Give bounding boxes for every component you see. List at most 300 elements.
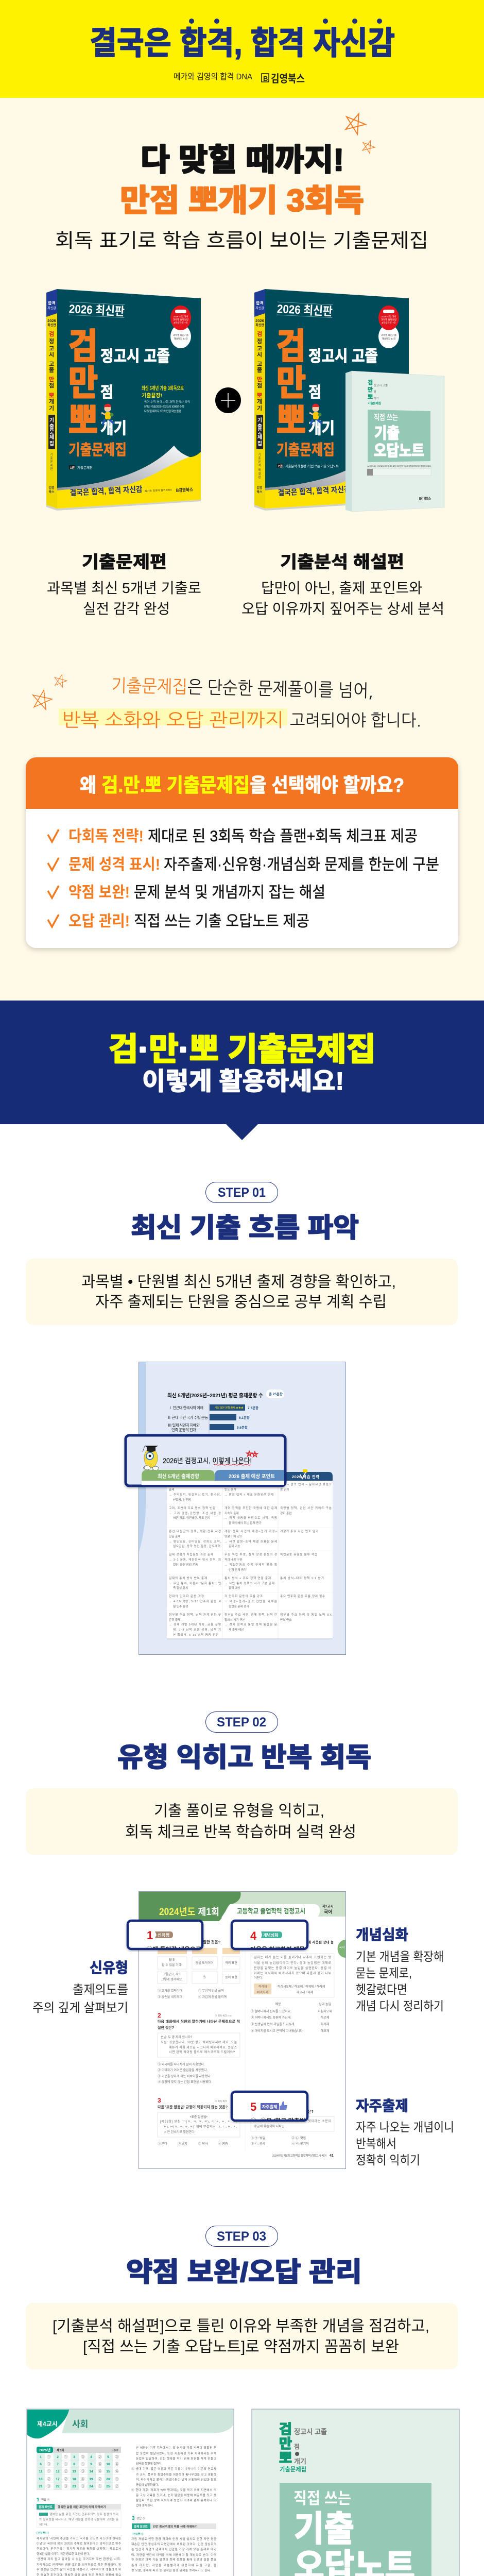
step 2 description: 기출 풀이로 유형을 익히고, <box>154 1803 324 1820</box>
spine text: 합격 <box>256 300 264 306</box>
answer key table: 25 <box>106 2485 110 2488</box>
table column 3: 주요 민주화 운동 흐름 정리 필수 <box>280 1594 325 1598</box>
spine text: 고 <box>49 346 54 352</box>
highlight box: concept depth <box>232 1921 307 1953</box>
page header: 제4교시 <box>37 2420 58 2428</box>
answer key table: 12 <box>56 2470 60 2473</box>
exam question 5: 첫이라는 소문이 <box>308 2119 331 2123</box>
table column 3: 개항기 주요 사건 연표 암기 <box>280 1529 318 1533</box>
step 3 description: [직접 쓰는 기출 오답노트]로 약점까지 꼼꼼히 보완 <box>83 2338 399 2355</box>
step 3 title: 약점 보완/오답 관리 <box>126 2258 362 2287</box>
exam question 4 <box>251 1940 334 2033</box>
cover red and white badges: 과목별 최신기출 <box>381 333 396 337</box>
bar chart: average questions: Ⅱ 근대 국민 국가 수립 운동 <box>167 1415 208 1420</box>
answer key table: p.169 <box>112 2449 118 2452</box>
cover red and white badges: &학습전략 7강 <box>174 321 188 325</box>
commentary left column <box>37 2497 121 2576</box>
table column 2: 개혁 정책을 추진한 국왕에 대한 문제 <box>224 1506 277 1510</box>
commentary right column: 는 인간과 자연의 관계에서 인간을 가장 가치 있는 존재로 여기 <box>131 2547 216 2551</box>
answer key table: 19 <box>89 2478 93 2481</box>
banner heading: 검·만·뽀 기출문제집 <box>109 1032 376 1067</box>
list item 4 <box>48 913 309 930</box>
spine text: 최신판 <box>47 323 56 327</box>
callout: new type: 신유형 <box>90 1960 128 1976</box>
callout: concept depth: 개념 다시 정리하기 <box>356 1999 444 2013</box>
book: commentary volume <box>254 289 409 511</box>
book caption: commentary volume <box>241 552 444 617</box>
exam question 2: ② 이해하기 어려운 줄임말을 사용했다. <box>158 2068 208 2072</box>
answer key table: 9 <box>90 2463 92 2466</box>
cover running kid mascot <box>309 404 322 425</box>
banner tagline: 메가와 김영의 합격 DNA <box>174 72 252 81</box>
exam question 2: 메뉴가 지회 셰프님 시그니처 메뉴라서요. 콘찰스 <box>169 2045 237 2049</box>
note series logo <box>279 2421 327 2473</box>
table column 2: 을 파악해야 하는 문제 증가 <box>229 1521 262 1525</box>
page header: 사회 <box>72 2419 88 2429</box>
cover big title: 개기 <box>308 419 335 437</box>
handwritten line 2 end: 고려되어야 합니다. <box>290 712 421 728</box>
answer key table: ① <box>47 2469 50 2473</box>
table column 1: → 경제 개발 5개년 계획, 금융 실명 <box>169 1622 221 1626</box>
book caption: commentary volume: 답만이 아닌, 출제 포인트와 <box>261 580 422 596</box>
table column 2: 인형 문제 증가 <box>229 1568 247 1572</box>
callout: concept depth: 헷갈렸다면 <box>356 1983 407 1997</box>
spine text: 기 <box>257 404 262 412</box>
commentary right column: 농업이 발달하여, 강한 햇빛을 막기 위해 창문을 작게 만들고 <box>136 2456 216 2461</box>
table column 1: 임오군란, 동학 농민 운동, 갑오개혁 <box>173 1544 220 1548</box>
page header <box>27 2410 233 2438</box>
white body background <box>0 1124 484 2576</box>
answer key table: ④ <box>98 2462 102 2466</box>
note series logo: 개기 <box>294 2458 306 2465</box>
mascot <box>143 1446 159 1470</box>
list item 2: 문제 성격 표시! <box>68 856 160 873</box>
step 2 description: 회독 체크로 반복 학습하며 실력 완성 <box>125 1824 356 1841</box>
exam question 2: 2 <box>158 2012 161 2019</box>
note logo: 뽀 <box>368 394 373 400</box>
commentary right column: | 정답풀이 | <box>132 2532 144 2536</box>
note logo <box>368 379 388 405</box>
highlight box: new type <box>128 1921 202 1953</box>
commentary right column: 인간 중심주의의 적용 사례 이해하기 <box>153 2524 197 2529</box>
spine text: 만 <box>49 376 54 383</box>
exam question 5: 은? <box>308 2110 314 2114</box>
table column 1: 흥선 대원군의 정책, 개항 전후 사건 <box>169 1529 221 1533</box>
answer key table: 17 <box>56 2478 60 2481</box>
highlight box: concept depth: 4 <box>250 1929 257 1942</box>
table column 2: 격과 내용 구분 <box>224 1557 243 1562</box>
cover red and white badges: &학습전략 7강 <box>382 321 396 325</box>
side tab: 국어 <box>339 1945 345 1950</box>
step 3 description <box>26 2303 458 2369</box>
note series logo: 기출문제집 <box>280 2465 306 2473</box>
list item 3 <box>48 884 325 901</box>
exam question 4: 하오체 <box>321 2015 329 2020</box>
spine text: 문 <box>50 460 53 464</box>
exam question 1: 등을 토닥이며 <box>196 1961 213 1965</box>
note series logo: 점 <box>294 2443 300 2450</box>
table column 3: 통치 방식–대표 정책 1:1 암기 <box>280 1576 324 1580</box>
commentary right column: 3 <box>132 2516 135 2521</box>
commentary left column: 제시문의 '시민이 주권을 가지고 국가를 스스로 다스려야 한다는 <box>37 2536 121 2540</box>
exam question 4: 예문 <box>275 2002 281 2006</box>
exam question 2: ⊙ 회독 체크 □□□ <box>215 2014 232 2018</box>
spine text: 편 <box>50 467 53 471</box>
exam page header: 2024년도 제1회 <box>159 1906 219 1918</box>
handwritten line 1: 기출문제집은 단순한 문제풀이를 넘어, <box>111 676 373 700</box>
exam question 1: ③ 양손을 내저으며 <box>158 1995 182 1999</box>
spine text: 졸 <box>257 367 262 374</box>
spine text: 점 <box>49 382 54 389</box>
exam question 4: ③ 선생님께 먼저 과일을 드리시게. <box>251 2022 295 2026</box>
bar chart: average questions <box>167 1389 284 1434</box>
cover volume label: 기출분석 해설편+직접 쓰는 기출 오답노트 <box>285 464 339 468</box>
hand-drawn stars <box>342 110 376 154</box>
bar chart: average questions: 민족 운동의 전개 <box>171 1427 196 1432</box>
cover feature text: 다 맞힐 때까지 3회독 만점 학습 플랜 <box>144 409 181 413</box>
commentary right column: ③ 냉대 기후: 짧은 여름과 추운 겨울이 나타나며 기온의 연교차 <box>131 2467 216 2471</box>
spine text: 시 <box>49 351 54 358</box>
sample commentary page <box>27 2409 234 2576</box>
table column 3: 강화 훈련 <box>280 1511 292 1515</box>
table column 3 <box>280 1482 332 1622</box>
note title block: 기출 <box>294 2510 354 2549</box>
table column 1: → 3·1 운동, 대한민국 임시 정부, 의 <box>169 1557 221 1562</box>
table column 2: 지속적 출제 <box>224 1511 239 1515</box>
highlight box: concept depth: 다음을 참고하여 예문 <box>250 1945 305 1953</box>
red squiggle and stars <box>214 1451 258 1465</box>
cream intro section <box>0 98 484 1001</box>
spine text: 정 <box>257 338 262 345</box>
exam question 3: ④ 봄층 <box>218 2142 228 2146</box>
answer key table: ④ <box>98 2469 102 2473</box>
spine text: 문 <box>49 429 54 435</box>
cover big title: 만 <box>276 364 306 403</box>
answer key table: 23 <box>72 2485 76 2488</box>
spine text: 제 <box>49 434 54 440</box>
spine text: 김영 <box>256 486 263 490</box>
table column 2: → 사건 발생–조약 체결 흐름형 문제 <box>224 1539 277 1544</box>
spine text: 고 <box>257 346 262 352</box>
table column 1: 일제 강점기 독립운동 과정 출제 <box>169 1552 213 1556</box>
spine text: 분 <box>258 460 261 464</box>
cover big title: 검 <box>68 327 98 366</box>
answer key table: ④ <box>115 2462 118 2466</box>
spine text: 출 <box>49 423 54 430</box>
answer key table: 2025년 <box>39 2448 50 2452</box>
list item 4: 오답 관리! <box>68 913 130 930</box>
step 3 description: [기출분석 해설편]으로 틀린 이유와 부족한 개념을 점검하고, <box>53 2318 429 2335</box>
exam page header: 제1교시 <box>322 1904 334 1908</box>
exam question 4: 하게체 <box>321 2022 329 2026</box>
exam question 4: ② 어머니께서도 동원에 가신대. <box>251 2015 291 2020</box>
answer key table: 1 <box>40 2455 42 2459</box>
table column 2: 빈도 증가 <box>224 1487 236 1492</box>
exam page header <box>139 1892 345 1921</box>
answer key table: 21 <box>39 2485 43 2488</box>
exam question 1: ④ 차갑게 등을 돌리며 <box>198 1995 227 1999</box>
navy how-to banner <box>0 1001 484 1140</box>
answer key table: ① <box>64 2462 68 2466</box>
exam question 2: 절한 것은? <box>158 2025 174 2030</box>
highlight box: frequent: ㉠~㉣을 '한글 맞춤법 <box>250 2117 305 2125</box>
cover big title <box>68 327 170 459</box>
exam question 3: ㅈ'은 된소리로 발음한다. <box>164 2130 196 2134</box>
table column 3: 정부별 주요 정책 및 통일 노력 OX <box>280 1613 332 1617</box>
book caption: problem volume <box>47 552 201 617</box>
step 2 pill: STEP 02 <box>217 1715 266 1730</box>
exam question 3: 다음 '표준 발음법' 규정이 적용되지 않는 것은? <box>158 2105 228 2109</box>
answer key table: 24 <box>89 2485 93 2488</box>
hand-drawn stars <box>30 673 68 710</box>
cover volume label <box>277 464 339 468</box>
spine text: 만 <box>257 376 262 383</box>
list item 3: 약점 보완! <box>68 884 130 901</box>
note logo: 정고시 고졸 <box>374 384 388 387</box>
answer key table: ① <box>98 2484 102 2488</box>
step 2 title: 유형 익히고 반복 회독 <box>117 1743 371 1773</box>
table: forecast <box>167 1469 333 1639</box>
step 1 pill <box>206 1182 278 1202</box>
cover red and white badges <box>378 306 399 348</box>
answer key table: ① <box>81 2462 84 2466</box>
answer key table: 7 <box>57 2463 59 2466</box>
step 3 <box>26 2226 459 2576</box>
step 1 description: 자주 출제되는 단원을 중심으로 공부 계획 수립 <box>95 1294 387 1311</box>
table column 2: 출제 예상 <box>229 1586 240 1590</box>
exam question 4: 하십시오체 / 하오체 / 하게체 / 해라체 <box>278 1985 325 1989</box>
answer key table: ③ <box>81 2469 84 2473</box>
spine text: 고 <box>49 361 54 367</box>
exam question 4: 해요체 <box>321 2029 329 2033</box>
cover bottom slogan: 결국은 합격, 합격 자신감 <box>70 485 143 498</box>
table column 1: → 4·19 혁명, 5·18 민주화 운동, 6 <box>169 1599 221 1603</box>
answer key table: ③ <box>115 2455 118 2459</box>
step 2 pill <box>206 1711 278 1732</box>
callout: concept depth: 묻는 문제로, <box>356 1967 412 1980</box>
answer key table: ① <box>47 2455 50 2459</box>
exam question 1 <box>158 1939 240 1999</box>
exam question 4: ① 할머니께서 진지를 드셨어요. <box>251 2009 291 2013</box>
top brand banner <box>0 0 484 98</box>
exam question 1: 그렇게 생각해요. <box>161 1977 183 1981</box>
highlight box: concept depth: 개념심화 <box>263 1933 279 1938</box>
exam question 5: ③ ㉢: 금세 <box>251 2142 265 2146</box>
callout: frequent: 자주출제 <box>356 2098 408 2114</box>
exam question 3: ② 낯지 <box>178 2142 187 2146</box>
table column 2: 종합형 문제 증가 <box>229 1604 250 1608</box>
commentary left column: 1 <box>37 2497 40 2503</box>
list item 1: 제대로 된 3회독 학습 플랜+회독 체크표 제공 <box>148 828 418 845</box>
answer key table: ④ <box>115 2469 118 2473</box>
note series logo: 만 <box>279 2436 292 2451</box>
cover big title: 뽀 <box>68 401 98 440</box>
spine text: 기 <box>49 404 54 412</box>
commentary left column: 지리적으로 안정적인 생활 조건을 의미하므로 정주 환경이다. 정 <box>37 2563 121 2567</box>
exam question 1: 절한 것은? <box>203 1939 221 1944</box>
blue tab: 2026 출제 예상 포인트 <box>229 1473 275 1480</box>
spine text: 설 <box>258 471 261 476</box>
cover red and white badges <box>170 306 191 348</box>
table column 3: – 왕의 업적 – 문화유산 묶음으 <box>287 1482 332 1486</box>
spine text: 개 <box>49 398 54 405</box>
callout: this is what comes out <box>126 1435 285 1486</box>
commentary right column <box>131 2446 216 2576</box>
exam question 3: [제23항] 받침 'ㄱ(ㄲ, ㅋ, ㄳ, ㄺ), ㄷ(ㅅ, ㅆ, ㅈ, ㅊ, <box>160 2120 237 2124</box>
callout: new type: 출제의도를 <box>73 1983 128 1997</box>
step 1 <box>26 1182 458 1655</box>
exam question 5: ① ㉠: 벚잎 <box>251 2136 265 2140</box>
exam question 4: 상대 높임 <box>319 2002 331 2006</box>
note logo mark: B김영북스 <box>419 496 431 501</box>
highlight box: frequent <box>232 2092 307 2125</box>
cover big title: 정고시 고졸 <box>100 347 170 365</box>
commentary right column: 훼손은 인간 중심주의 자연관에서 비롯된 것이다. 인간 중심주의 <box>131 2542 216 2546</box>
exam question 3: •표준 발음법• <box>190 2115 208 2119</box>
exam question 5 <box>251 2110 334 2158</box>
cover edition label: 2026 최신판 <box>68 302 125 318</box>
spine text: 문 <box>257 429 262 435</box>
commentary right column: ④ 한대 기후: 저표가 녹아 땅과되는 것을 막기 위해 지면에서 띄 <box>131 2488 216 2492</box>
commentary left column: 출제 포인트 <box>39 2505 53 2509</box>
exam question 4: 하십시오체 <box>318 2009 332 2013</box>
exam page header: 국어 <box>324 1909 333 1914</box>
commentary right column: 한 관점은 과학 기술 발전과 경제 성장을 통해 인간의 삶을 풍요 <box>131 2557 216 2562</box>
highlight box: new type: 1 <box>147 1929 153 1942</box>
commentary right column: 자원 개발로 인한 환경 파괴와 인공 시설 설치로 인한 자연 경관 <box>131 2537 216 2541</box>
table column 1: → 고려 광종·공민왕, 조선 세종·광 <box>169 1511 221 1515</box>
spine text: 기 <box>49 417 54 423</box>
answer key table: 16 <box>39 2478 43 2481</box>
table column 1: 신흥왕, 신문왕 <box>173 1498 191 1502</box>
step 3 pill: STEP 03 <box>217 2229 266 2244</box>
commentary right column: 외벽을 하얗게 칠한다. <box>136 2462 162 2466</box>
answer key table: 3 <box>73 2455 75 2459</box>
cover feature text: 기출끝장! <box>142 392 162 399</box>
cover big title: 검 <box>276 327 306 366</box>
cover feature text: 최신 5개년 기출 3회독으로 <box>142 385 184 392</box>
exam question 1: 그렇군요, 저도 <box>163 1972 182 1976</box>
step 2 sample exam page <box>128 1892 346 2169</box>
spine text: 검 <box>49 331 54 337</box>
answer key table: 4 <box>90 2455 92 2459</box>
cover bottom slogan: B김영북스 <box>176 486 193 493</box>
exam question 3: ⊙ 회독 체크 <box>215 2099 227 2103</box>
commentary left column: 주 환경은 인간의 삶의 터전을 마련하고, 지속적으로 생활하기 위 <box>37 2567 121 2571</box>
spine text: 김영 <box>48 486 55 490</box>
note green title block <box>368 410 430 462</box>
cover big title: 기출문제집 <box>276 442 335 459</box>
spine text: 합격 <box>48 300 56 306</box>
exam question 4: 밀하는 메가 듣는 이를 높이거나 낮추어 표현하는 방 <box>254 1955 331 1959</box>
panel heading: 왜 검.만.뽀 기출문제집을 선택해야 할까요? <box>80 775 404 796</box>
note logo: 검 <box>368 379 373 386</box>
cover red and white badges: 해설특강 14강 <box>174 337 187 341</box>
commentary left column: 주의이다. 민주주의는 정치적 자유와 평등을 보장하는 제도로서 <box>37 2547 121 2551</box>
book caption: commentary volume: 기출분석 해설편 <box>280 552 404 571</box>
table column 1: 단골 출제 <box>169 1534 181 1538</box>
spine text: 2026 <box>255 318 264 323</box>
commentary right column: 정답 ③ <box>136 2516 146 2520</box>
table column 2: → 정책 내용을 바탕으로 시책, 국왕 <box>224 1516 278 1520</box>
cover bottom slogan: 결국은 합격, 합격 자신감 <box>278 485 351 498</box>
commentary right column: 활한다. 또한 땅이 척박하여 농업이 어려워 순록 유목이나 어 <box>136 2498 216 2502</box>
answer key table: 5 <box>107 2455 109 2459</box>
answer key table: ③ <box>64 2484 68 2488</box>
commentary left column: 제이다. <box>39 2522 48 2527</box>
table column 2: → 경제 정책과 통일 정책 통합형 문 <box>224 1622 277 1626</box>
banner logo: 김영북스 <box>271 73 305 85</box>
table column 2: → 왕의 업적 + 대표 문화유산 연계 <box>224 1493 273 1497</box>
exam question 5: ㉣금세 ㉤들어와 나타난. <box>254 2124 285 2128</box>
answer key table: ② <box>64 2469 68 2473</box>
bar chart: average questions: 가장 많은 문항 출제 ★★★ <box>215 1405 244 1410</box>
commentary left column: 행복한 삶을 위한 조건인 민주주의와 정주 환경의 의미 <box>49 2512 118 2516</box>
banner logo <box>262 73 305 85</box>
handwritten line 2: 반복 소화와 오답 관리까지 <box>62 711 284 730</box>
answer key table: 18 <box>72 2478 76 2481</box>
exam question 2: ④ 상황에 맞지 않는 간접 표현을 사용했다. <box>158 2080 212 2084</box>
table column 1: 정부별 주요 정책, 남북 관계 변화 꾸 <box>169 1613 221 1617</box>
table column 1: 열단, 물산 장려 운동 <box>173 1563 198 1567</box>
table column 3: 독립운동 유형별 분류 학습 <box>280 1552 317 1556</box>
spine text: 고 <box>257 361 262 367</box>
panel: why choose <box>26 757 458 948</box>
answer key table: 2 <box>57 2455 59 2459</box>
exam question 4: 어진다. <box>254 1976 264 1980</box>
exam question 5: ④ ㉣: 붙기져 <box>291 2142 309 2146</box>
commentary right column: 출제 포인트 <box>134 2524 148 2529</box>
note title block: 직접 쓰는 <box>293 2489 351 2507</box>
cover red and white badges: 과목별 최신기출 <box>173 333 188 337</box>
exam question 3: ③ 탐사 <box>198 2142 208 2146</box>
note fine print <box>367 465 431 476</box>
commentary left column: 행복한 삶을 이루기 위한 중요한 조건이 된다. <box>37 2552 90 2556</box>
answer key table: ③ <box>47 2462 50 2466</box>
book caption: commentary volume: 오답 이유까지 짚어주는 상세 분석 <box>241 601 444 617</box>
list item 2 <box>48 856 439 873</box>
spine text: 출 <box>257 423 262 430</box>
spine text: 시 <box>257 351 262 358</box>
exam question 4: 비격식체 <box>257 1990 268 1994</box>
cover red and white badges: 해설특강 14강 <box>382 337 395 341</box>
spine text: 집 <box>49 440 54 447</box>
panel header <box>26 757 458 809</box>
exam question 4: 미에는 격식체와 비격식체가 있으며 다음과 같이 나누 <box>254 1971 331 1975</box>
banner subheading: 이렇게 활용하세요! <box>142 1068 344 1095</box>
table column 1: 일제의 통치 방식 반복 출제 <box>169 1576 207 1580</box>
table column 1: 해군·정조, 임진왜란, 제도 정치 <box>173 1516 211 1520</box>
spine text <box>255 300 264 494</box>
highlight box: frequent: 5 <box>250 2100 256 2113</box>
table column 1: 고려, 조선의 주요 왕의 정책 빈출 <box>169 1506 215 1510</box>
note green title block: 오답노트 <box>374 443 424 460</box>
note logo: 기출문제집 <box>368 401 381 405</box>
table column 2: 출제 가능 <box>229 1544 240 1548</box>
blue tab <box>215 1470 284 1481</box>
answer key table: 11 <box>39 2470 43 2473</box>
answer key table: ② <box>115 2484 118 2488</box>
highlight box: frequent: 자주출제 <box>262 2104 277 2109</box>
spine text: 기 <box>50 452 53 456</box>
answer key table: ② <box>98 2455 102 2459</box>
commentary right column: 공업이 발달하였다. <box>136 2483 159 2487</box>
exam question 1: 격려 표현 <box>225 1961 237 1965</box>
commentary right column: 합 농업이 발달하였다. 또한 지중해성 기후 지역에서는 수목 <box>136 2451 216 2455</box>
banner emphasis dots <box>189 19 382 24</box>
exam question 4: 문장을 끝맺는 종결 어미로 높임을 실현한다. 종결 어 <box>254 1966 331 1970</box>
table column 1: 제, 7·4 남북 공동 성명, 남북 기 <box>173 1628 221 1632</box>
